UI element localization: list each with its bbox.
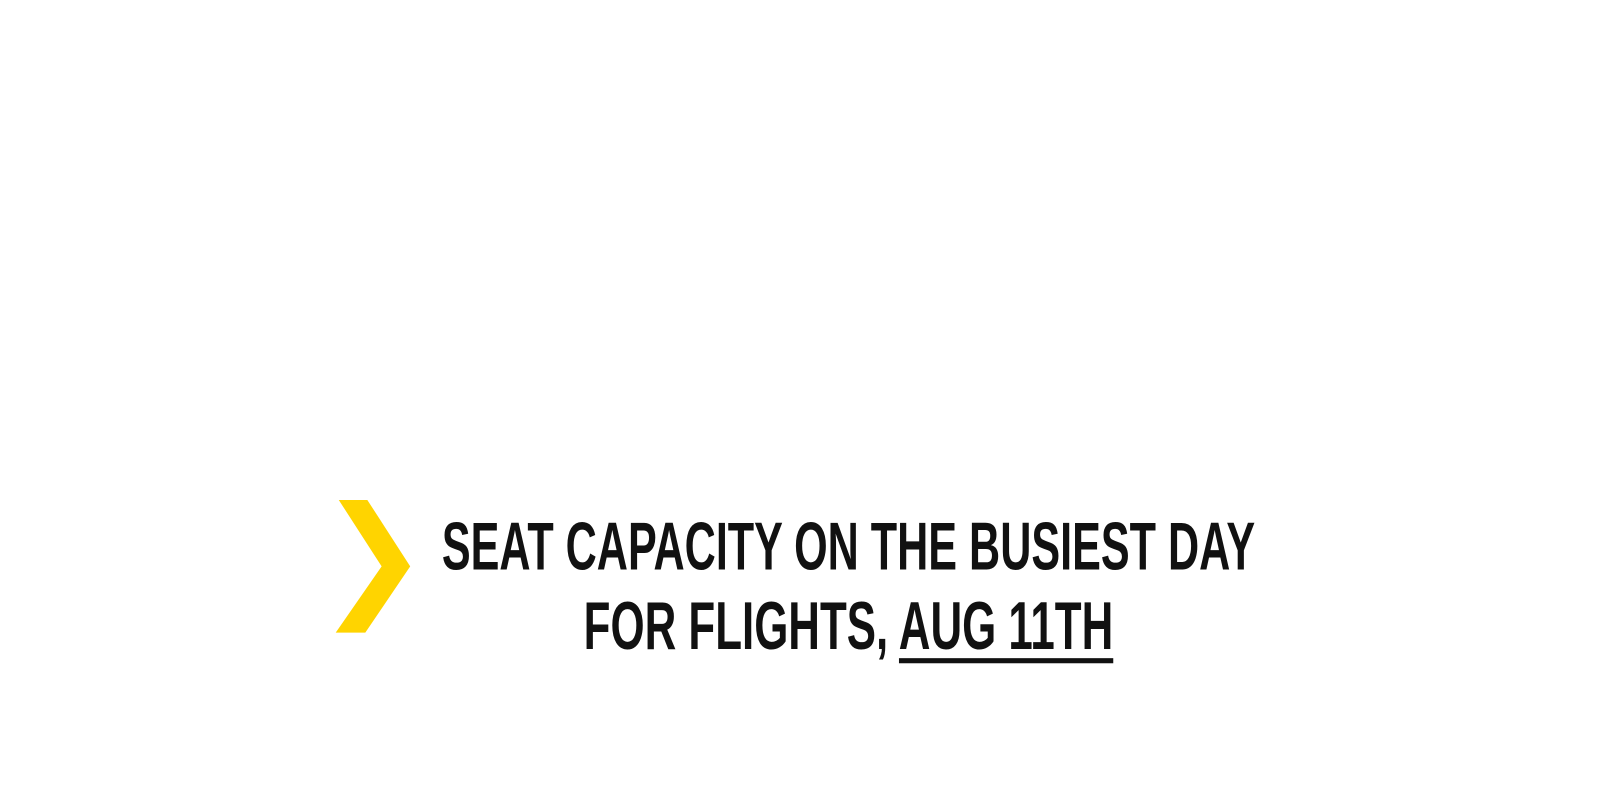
heading: FOR FLIGHTS, AUG 11TH [584,589,1113,664]
heading [442,509,1255,664]
icon: yellow chevron [336,500,410,633]
